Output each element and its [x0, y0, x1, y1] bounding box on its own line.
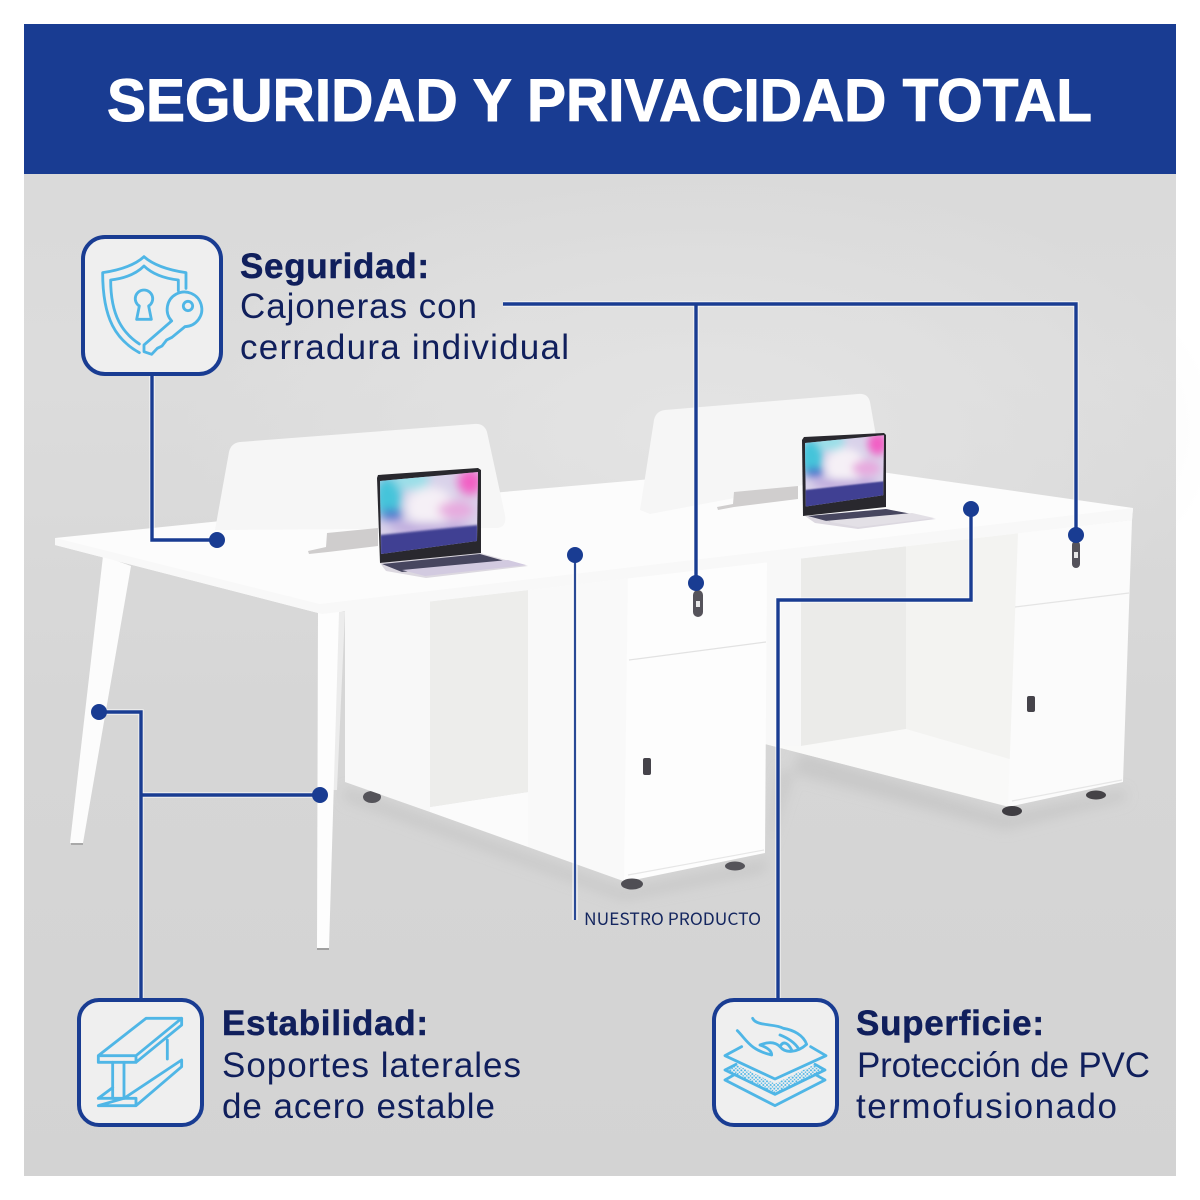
drawer lock front: [693, 590, 703, 617]
title banner: [24, 24, 1176, 174]
description: de acero estable: [222, 1087, 495, 1126]
description: cerradura individual: [240, 328, 569, 367]
laptop right: [800, 429, 936, 529]
floor shadow: [345, 752, 1125, 900]
heading: Estabilidad:: [222, 1004, 428, 1043]
connector: estabilidad to legs: [91, 704, 328, 998]
door handle rear: [1027, 696, 1035, 712]
desk top: [55, 464, 1133, 614]
cable tray right: [717, 486, 798, 510]
connector: seguridad text to locks: [503, 304, 1084, 591]
connector: seguridad box to desk: [152, 375, 225, 548]
desk product illustration: [55, 394, 1133, 950]
privacy screen left: [215, 424, 505, 530]
desk legs: [70, 556, 345, 950]
callout: estabilidad: [79, 1000, 521, 1126]
rear cabinet structure: [765, 520, 1132, 816]
description: [240, 287, 569, 367]
icon box: steel beam: [79, 1000, 202, 1125]
drawer lock rear: [1072, 541, 1080, 568]
cable tray left: [308, 528, 378, 554]
title: SEGURIDAD Y PRIVACIDAD TOTAL: [107, 67, 1092, 134]
description: [222, 1046, 521, 1126]
description: Protección de PVC: [857, 1046, 1150, 1085]
connector: superficie to desk top: [778, 501, 979, 998]
callout: seguridad: [83, 237, 569, 374]
callout: superficie: [714, 1000, 1150, 1126]
connector: product caption line: [567, 547, 583, 920]
description: Soportes laterales: [222, 1046, 521, 1085]
laptop left: [374, 465, 528, 578]
front cabinet structure: [345, 560, 767, 890]
icon box: hand on layers: [714, 1000, 837, 1125]
heading: Superficie:: [856, 1004, 1044, 1043]
description: [856, 1046, 1150, 1126]
privacy screen right: [640, 394, 882, 514]
description: termofusionado: [856, 1087, 1117, 1126]
description: Cajoneras con: [240, 287, 477, 326]
icon box: shield and key: [83, 237, 221, 374]
door handle front: [643, 758, 651, 775]
product caption: NUESTRO PRODUCTO: [584, 905, 761, 930]
heading: Seguridad:: [240, 247, 429, 286]
